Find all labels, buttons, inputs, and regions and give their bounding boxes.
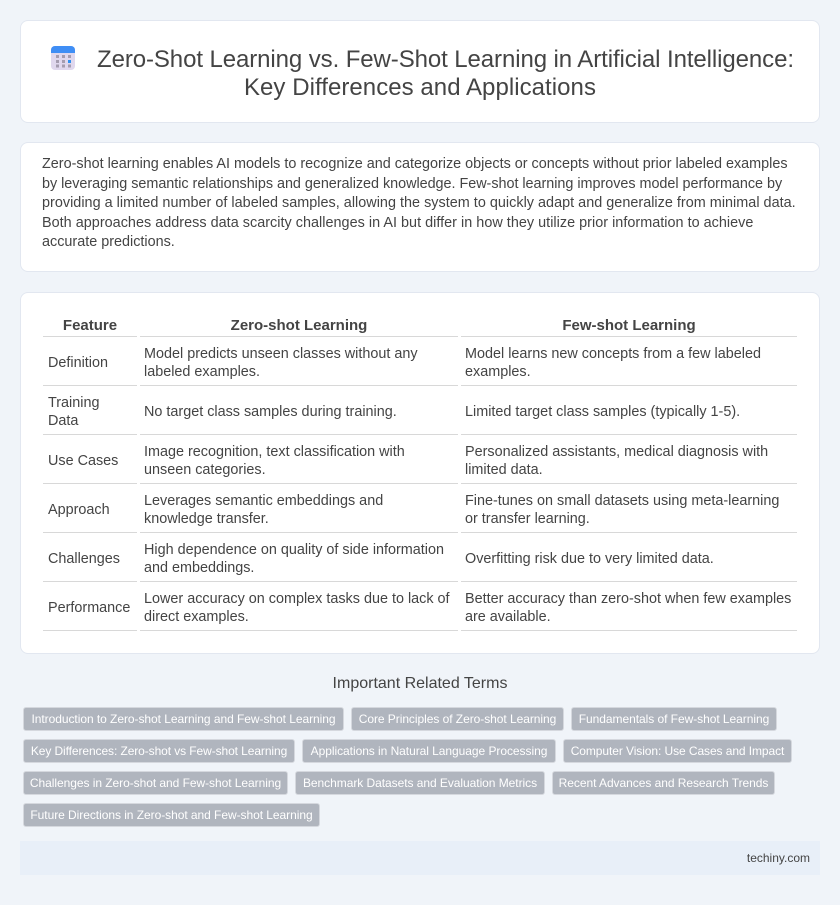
chip xyxy=(351,707,564,731)
row: use cases: Personalized assistants, medical diagnosis with xyxy=(465,444,768,460)
summary text: providing a limited number of labeled samples, allowing the system to quickly adapt and generalize from minimal data. xyxy=(42,195,796,211)
chip xyxy=(295,771,545,795)
row: performance xyxy=(48,591,791,625)
row: training data xyxy=(48,395,740,429)
summary text: Zero-shot learning enables AI models to recognize and categorize objects or concepts without prior labeled examples xyxy=(42,156,788,172)
summary text xyxy=(42,156,796,250)
row: definition: examples. xyxy=(465,364,531,380)
row: challenges: High dependence on quality of side information xyxy=(144,542,444,558)
row: performance: Lower accuracy on complex tasks due to lack of xyxy=(144,591,450,607)
row: definition: Model predicts unseen classes without any xyxy=(144,346,418,362)
header card xyxy=(20,20,820,123)
row: use cases: limited data. xyxy=(465,462,543,478)
chip: Future Directions in Zero-shot and Few-shot Learning xyxy=(30,808,313,822)
header: zero-shot learning: Zero-shot Learning xyxy=(231,317,367,334)
row: approach: Fine-tunes on small datasets using meta-learning xyxy=(465,493,779,509)
row: challenges xyxy=(48,542,714,576)
title: Key Differences and Applications xyxy=(244,74,596,101)
chip: Introduction to Zero-shot Learning and Few-shot Learning xyxy=(31,712,336,726)
chip xyxy=(571,707,777,731)
row: definition: Model learns new concepts from a few labeled xyxy=(465,346,761,362)
header: few-shot learning: Few-shot Learning xyxy=(562,317,696,334)
row: use cases xyxy=(48,444,768,478)
chip: Core Principles of Zero-shot Learning xyxy=(359,712,556,726)
chip: Key Differences: Zero-shot vs Few-shot Learning xyxy=(31,744,287,758)
row: use cases: Image recognition, text classification with xyxy=(144,444,405,460)
chip xyxy=(23,771,288,795)
summary text: by leveraging semantic relationships and generalized knowledge. Few-shot learning improves model performance by xyxy=(42,176,782,192)
summary text: Both approaches address data scarcity challenges in AI but differ in how they utilize prior information to achieve xyxy=(42,214,753,230)
chip: Recent Advances and Research Trends xyxy=(559,776,768,790)
row: approach xyxy=(48,493,779,527)
row: definition xyxy=(48,346,761,380)
row: training data: No target class samples during training. xyxy=(144,404,397,420)
row: performance: Better accuracy than zero-shot when few examples xyxy=(465,591,791,607)
row: challenges: Overfitting risk due to very limited data. xyxy=(465,551,714,567)
chip: Computer Vision: Use Cases and Impact xyxy=(571,744,784,758)
related terms chips xyxy=(23,707,792,827)
row: use cases: Use Cases xyxy=(48,453,118,469)
row: definition: Definition xyxy=(48,355,108,371)
row: training data: Data xyxy=(48,413,78,429)
row: approach: or transfer learning. xyxy=(465,511,590,527)
comparison table xyxy=(43,317,797,631)
row: approach: knowledge transfer. xyxy=(144,511,269,527)
chip xyxy=(302,739,556,763)
row: definition: labeled examples. xyxy=(144,364,260,380)
title: Zero-Shot Learning vs. Few-Shot Learning in Artificial Intelligence: xyxy=(97,46,794,73)
title xyxy=(97,46,794,101)
chip xyxy=(23,803,320,827)
row: approach: Leverages semantic embeddings and xyxy=(144,493,383,509)
row: use cases: unseen categories. xyxy=(144,462,266,478)
chip: Fundamentals of Few-shot Learning xyxy=(579,712,769,726)
chip xyxy=(23,707,344,731)
row: performance: are available. xyxy=(465,609,551,625)
row: performance: Performance xyxy=(48,600,130,616)
row: performance: direct examples. xyxy=(144,609,249,625)
chip xyxy=(563,739,792,763)
row: challenges: and embeddings. xyxy=(144,560,254,576)
row: training data: Limited target class samples (typically 1-5). xyxy=(465,404,740,420)
footer brand: techiny.com xyxy=(747,851,810,865)
panel: summary xyxy=(20,142,820,272)
footer xyxy=(20,841,820,875)
related terms heading: Important Related Terms xyxy=(333,675,507,692)
row: approach: Approach xyxy=(48,502,110,518)
panel: comparison table xyxy=(20,292,820,654)
chip: Applications in Natural Language Processing xyxy=(311,744,547,758)
header: feature: Feature xyxy=(63,317,117,334)
chip xyxy=(552,771,775,795)
chip: Challenges in Zero-shot and Few-shot Learning xyxy=(30,776,281,790)
icon: calendar grid xyxy=(51,46,75,70)
row: training data: Training xyxy=(48,395,99,411)
summary text: accurate predictions. xyxy=(42,234,175,250)
row: challenges: Challenges xyxy=(48,551,120,567)
chip xyxy=(23,739,295,763)
chip: Benchmark Datasets and Evaluation Metrics xyxy=(303,776,537,790)
